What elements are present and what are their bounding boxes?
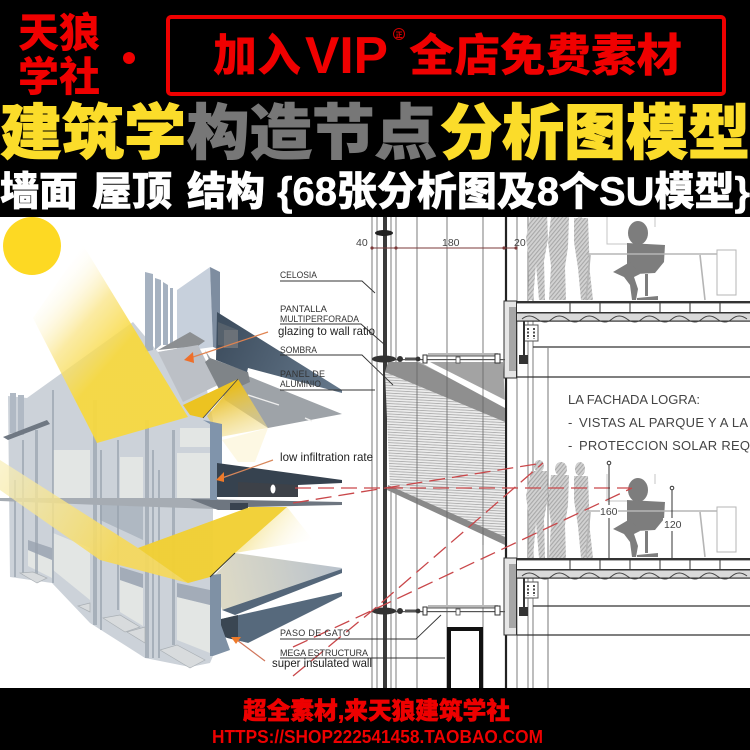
sun beam upper [33, 245, 188, 443]
dimension line top: 20 [514, 237, 526, 249]
upper tower with fins [177, 267, 213, 352]
sunshade upper [372, 353, 528, 364]
main title [0, 100, 750, 167]
leader labels: SOMBRA [280, 345, 317, 355]
dimension line top: 40 [356, 237, 368, 249]
lower louver band [387, 485, 505, 545]
leader labels: glazing to wall ratio [278, 324, 375, 338]
upper column [203, 420, 222, 480]
fade below column [222, 428, 268, 462]
section text note: - [568, 415, 572, 430]
subtitle: 屋顶 [92, 170, 172, 214]
leader labels: CELOSIA [280, 270, 317, 280]
main mullion [383, 217, 387, 688]
red sight lines [293, 463, 632, 676]
lower beam fade [235, 507, 313, 553]
height dimension 120: 120 [664, 519, 682, 531]
main title: 分析图模型 [440, 100, 750, 167]
main facade body [8, 322, 213, 667]
VIP banner: 全店免费素材 [409, 30, 682, 81]
sunshade lower [372, 605, 528, 616]
paving steps [20, 572, 205, 668]
logo separator dot [123, 52, 135, 64]
louver panel [385, 372, 505, 543]
lower column [210, 574, 230, 656]
leader labels: ALUMINIO [280, 379, 321, 389]
VIP banner: VIP [305, 27, 388, 85]
main title: 建筑学 [0, 100, 186, 167]
header background [0, 0, 750, 217]
logo: 天狼学社: 学社 [18, 54, 100, 100]
subtitle: 墙面 [0, 170, 78, 214]
inner column line [547, 348, 549, 688]
leader labels [272, 270, 445, 670]
mid dark cantilever [217, 463, 342, 497]
mid floor band [0, 498, 230, 509]
lower dark cantilever [217, 592, 342, 643]
lower grey soffit [205, 350, 342, 428]
leader labels: PANEL DE [280, 369, 325, 379]
subtitle: {68张分析图及8个SU模型} [277, 170, 750, 214]
logo: 天狼学社: 天狼 [18, 10, 100, 56]
grid over hatch [417, 362, 483, 545]
VIP banner [168, 17, 724, 94]
ceilings [517, 347, 750, 635]
footer slogan: 超全素材,来天狼建筑学社 [243, 697, 510, 725]
seated woman lower [586, 474, 736, 557]
upper left fins [3, 393, 50, 440]
door [449, 629, 481, 691]
arrow: glazing to wall ratio [184, 332, 268, 363]
arrow: low infiltration rate [216, 460, 273, 482]
vertical fins [14, 390, 175, 658]
main title: 构造节点 [187, 100, 437, 167]
height dimension 160: 160 [600, 506, 618, 518]
leader labels: MEGA ESTRUCTURA [280, 648, 368, 658]
leader labels: PASO DE GATO [280, 628, 350, 638]
pocket shade plane [158, 332, 205, 350]
section text note: - [568, 438, 572, 453]
upper right yellow fold [183, 379, 238, 418]
section text note: VISTAS AL PARQUE Y A LA [579, 415, 748, 430]
wall line [505, 217, 507, 688]
dimension line top: 180 [442, 237, 460, 249]
upper shade wedge [385, 362, 505, 422]
lower slab [213, 553, 342, 610]
leader labels: low infiltration rate [280, 450, 373, 464]
section text note: PROTECCION SOLAR REQ [579, 438, 750, 453]
leader labels: PANTALLA [280, 304, 327, 314]
dimension line top [356, 230, 526, 250]
subtitle: 结构 [187, 170, 265, 214]
VIP banner: 加入 [213, 30, 301, 81]
darker glass bands [28, 503, 210, 605]
window panels [28, 428, 210, 653]
sun [3, 217, 61, 275]
people lower [526, 460, 593, 558]
leader labels: super insulated wall [272, 656, 372, 670]
floor slab lower [504, 558, 750, 635]
drawing area background [0, 217, 750, 688]
VIP banner: 正 [396, 31, 402, 39]
section text note: LA FACHADA LOGRA: [568, 392, 700, 407]
subtitle [0, 170, 750, 214]
floor slab upper [504, 301, 750, 378]
panel: 3D facade axonometric [0, 245, 342, 668]
people upper [526, 217, 593, 300]
section text note [568, 392, 750, 453]
grid lines [372, 217, 533, 688]
height dimension 160 [600, 461, 618, 558]
arrow: super insulated wall [231, 637, 265, 661]
seated woman upper [586, 217, 736, 300]
footer background [0, 688, 750, 750]
height dimension 120 [663, 486, 682, 558]
upper dark cantilever [216, 312, 342, 393]
panel: section drawing [293, 202, 750, 691]
leader labels: MULTIPERFORADA [280, 314, 359, 324]
footer url: HTTPS://SHOP222541458.TAOBAO.COM [212, 727, 543, 747]
logo: 天狼学社 [18, 10, 100, 100]
sun beam lower [0, 460, 287, 583]
